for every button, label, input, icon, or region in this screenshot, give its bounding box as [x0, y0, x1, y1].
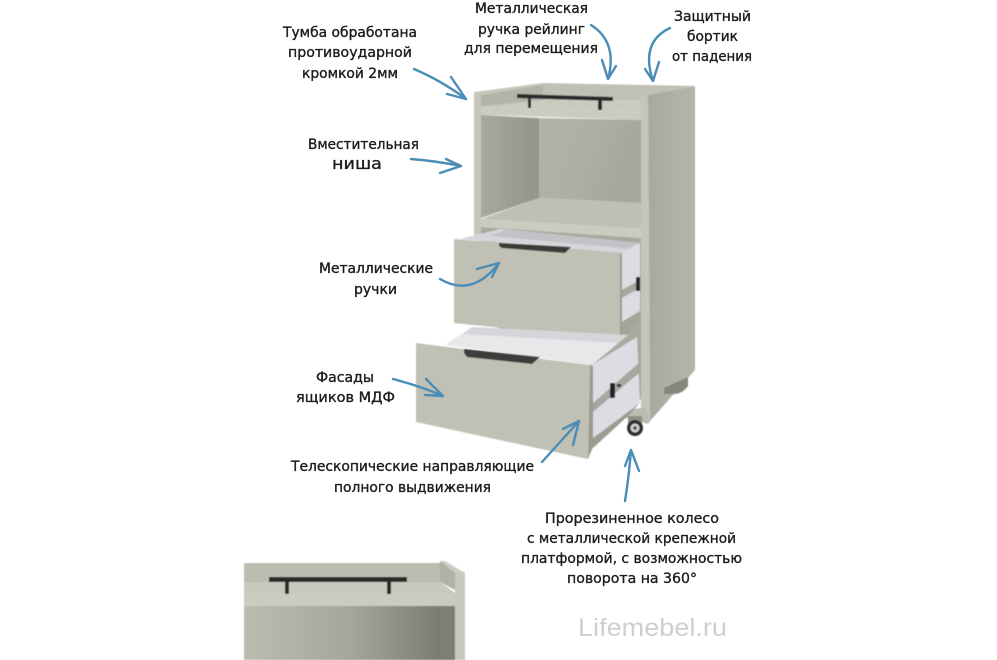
label: rail handle: Металлическая — [475, 1, 588, 17]
right side panel — [648, 86, 695, 421]
top rim — [541, 83, 695, 100]
top shelf edge — [481, 107, 641, 120]
label: metal handles: Металлические — [319, 261, 433, 277]
label: rail handle: ручка рейлинг — [478, 22, 585, 38]
label: MDF fronts: Фасады — [316, 370, 374, 386]
label: protective rim: бортик — [687, 29, 738, 45]
label: metal handles — [319, 261, 433, 298]
label: rail handle: для перемещения — [464, 41, 598, 57]
label: telescopic slides — [290, 459, 534, 496]
arrow: telescopic slides — [542, 421, 579, 462]
label: wheel: платформой, с возможностью — [521, 551, 742, 567]
plinth and wheel — [620, 407, 650, 436]
arrow: rail handle — [591, 25, 616, 79]
label: impact edge: противоударной — [288, 45, 412, 61]
lower drawer — [416, 327, 640, 459]
label: niche — [308, 137, 419, 173]
upper drawer — [454, 229, 640, 340]
label: wheel: с металлической крепежной — [527, 531, 736, 547]
arrow: MDF fronts — [393, 379, 443, 396]
front right post — [641, 95, 650, 421]
label: protective rim: Защитный — [674, 9, 751, 25]
label: metal handles: ручки — [354, 282, 397, 298]
label: protective rim: от падения — [672, 49, 752, 65]
label: impact edge: Тумба обработана — [282, 25, 417, 41]
label: wheel: Прорезиненное колесо — [545, 511, 719, 527]
inset handle — [269, 577, 407, 594]
detail inset: rail handle close-up — [244, 561, 465, 660]
cavity under shelf — [481, 227, 641, 400]
label: protective rim — [672, 9, 752, 65]
arrow: metal handles — [440, 263, 499, 286]
label: wheel: поворота на 360° — [567, 571, 697, 587]
watermark: Lifemebel.ru — [578, 614, 727, 642]
label: rail handle — [464, 1, 598, 57]
label: MDF fronts: ящиков МДФ — [296, 390, 395, 406]
label: MDF fronts — [296, 370, 395, 406]
arrow: niche — [411, 159, 461, 173]
label: wheel — [521, 511, 742, 587]
label: telescopic slides: Телескопические направляющие — [290, 459, 534, 475]
rear wheel — [664, 377, 688, 394]
label: niche: Вместительная — [308, 137, 419, 153]
rail handle — [517, 94, 613, 110]
label: telescopic slides: полного выдвижения — [334, 480, 491, 496]
label: impact edge — [282, 25, 417, 82]
upper drawer handle — [499, 243, 571, 253]
cabinet illustration — [416, 83, 695, 459]
arrow: impact edge — [414, 69, 466, 99]
arrow: wheel — [625, 450, 639, 501]
label: niche: ниша — [332, 154, 382, 173]
label: impact edge: кромкой 2мм — [302, 66, 398, 82]
open niche — [481, 115, 641, 238]
lower drawer handle — [464, 349, 540, 364]
arrow: protective rim — [645, 28, 670, 81]
